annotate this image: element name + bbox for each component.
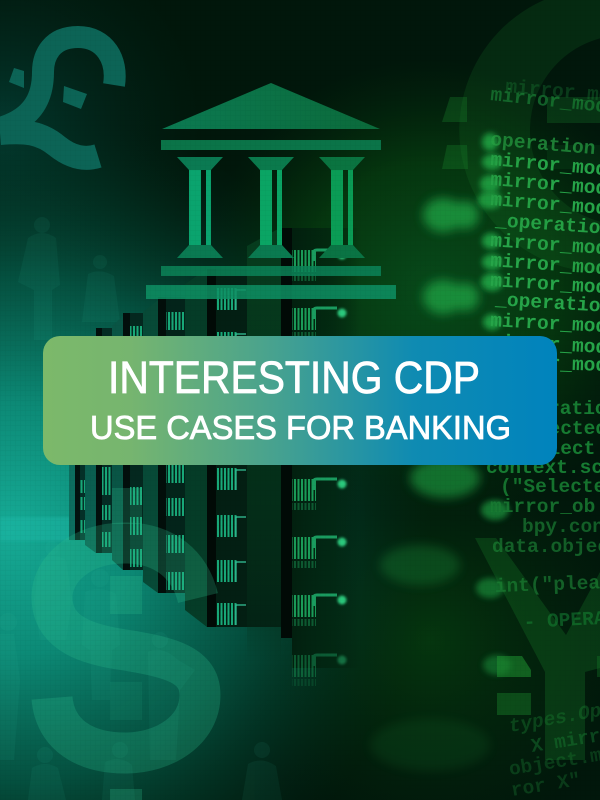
code text: lower block: mirror_ob — [490, 496, 595, 518]
code text: lower block — [486, 398, 600, 800]
code text: upper block: operation — [489, 129, 596, 160]
title line 1: INTERESTING CDP — [108, 352, 480, 403]
code text: upper block — [489, 76, 600, 377]
left column — [177, 157, 223, 258]
icon: dollar symbol — [52, 488, 200, 800]
right column — [319, 157, 365, 258]
rack 5 — [185, 269, 281, 627]
silhouettes of people — [0, 217, 282, 800]
rack 4 — [143, 297, 207, 593]
blurred light blobs — [370, 133, 511, 771]
server racks — [69, 228, 360, 686]
rack 3 — [112, 313, 158, 570]
rack 2 — [85, 328, 124, 553]
icon: yen symbol — [475, 538, 600, 760]
icon: pound symbol — [0, 37, 115, 158]
middle column — [248, 157, 294, 258]
rack 1 — [69, 340, 97, 540]
code text: lower block: ob.select — [490, 438, 595, 460]
rack 6 — [247, 228, 360, 686]
roof — [162, 83, 380, 129]
icon: bank building — [146, 83, 396, 299]
title line 2: USE CASES FOR BANKING — [90, 410, 511, 447]
entablature — [161, 140, 381, 150]
icon: euro symbol — [442, 0, 600, 272]
base steps — [161, 266, 381, 276]
title banner — [43, 336, 557, 465]
